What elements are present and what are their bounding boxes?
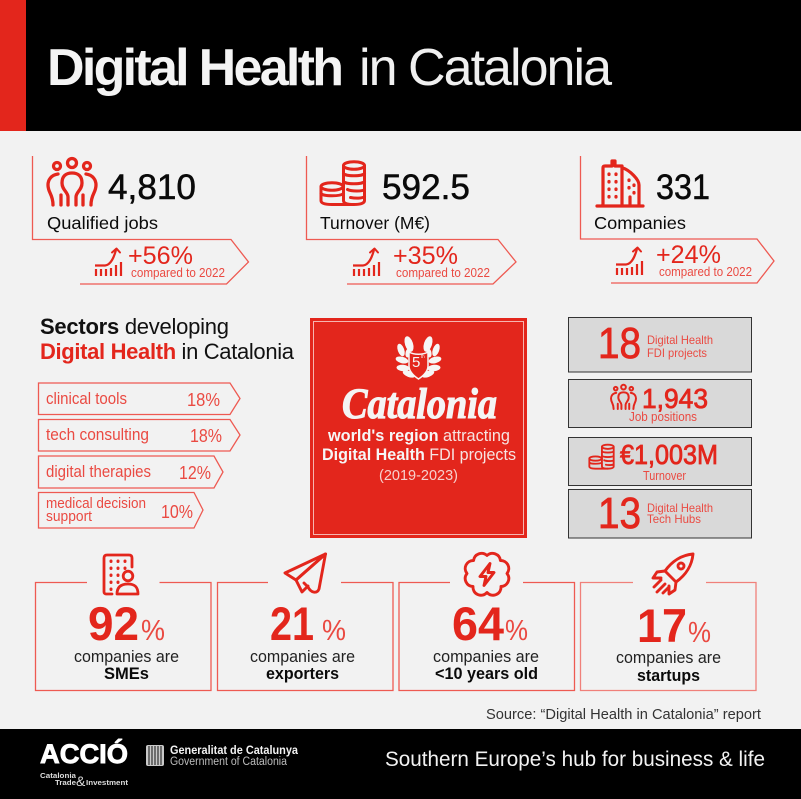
label bold: <10 years old: [435, 665, 538, 683]
logo: ACCIO: Catalonia: [40, 771, 77, 780]
panel: qualified jobs: [32, 156, 248, 284]
percent sign: %: [505, 615, 528, 647]
logo: ACCIO: Trade: [55, 778, 76, 787]
footer band: [0, 729, 801, 799]
value: turnover: 592.5: [382, 168, 470, 207]
icon: coins: [589, 445, 614, 469]
icon: people: [48, 158, 96, 205]
tagline: Southern Europe’s hub for business & life: [385, 748, 765, 771]
panel: tech hubs: Tech Hubs: [647, 512, 701, 526]
panel: FDI turnover: Turnover: [643, 469, 686, 483]
value: SMEs: 92: [88, 597, 139, 650]
sector: medical decision support: support: [46, 509, 92, 525]
sector: clinical tools: [38, 383, 240, 414]
panel: FDI turnover: €1,003M: [620, 439, 718, 470]
label: jobs: Qualified jobs: [47, 213, 158, 233]
value: exporters: 21: [270, 597, 314, 650]
icon: coins: [321, 162, 364, 204]
logo: ACCIO: [40, 738, 129, 789]
sector: clinical tools: clinical tools: [46, 389, 127, 408]
panel: SMEs: [36, 555, 211, 690]
heading: digital health: Digital Health in Catalonia: [40, 339, 295, 364]
title: Digital Health: [47, 39, 344, 97]
label: companies are: [250, 648, 355, 666]
panel: FDI projects: 18: [598, 319, 641, 368]
label bold: exporters: [266, 665, 339, 683]
panel: job positions: Job positions: [629, 409, 697, 424]
government name: Government of Catalonia: [170, 756, 288, 768]
label: companies are: [616, 649, 721, 667]
label bold: SMEs: [104, 665, 149, 683]
icon: rocket: [653, 554, 693, 594]
title: [47, 39, 612, 97]
label: companies: Companies: [594, 213, 686, 233]
growth: companies: +24%: [656, 241, 721, 269]
logo: ACCIO: Investment: [86, 778, 129, 787]
script name: Catalonia: [342, 381, 497, 428]
panel: tech hubs: [568, 489, 752, 538]
icon: brain with bolt: [465, 553, 509, 595]
panel: startups: [580, 554, 756, 690]
panel: job positions: 1,943: [642, 383, 708, 414]
heading: sectors: Sectors developing: [40, 314, 229, 339]
logo: ACCIO: ACCIÓ: [40, 738, 128, 769]
panel: ranking: [310, 318, 527, 538]
sector: medical decision support: 10%: [161, 502, 193, 522]
percent sign: %: [688, 617, 711, 649]
ranking text: world's region attracting: [327, 426, 510, 445]
note: turnover: compared to 2022: [396, 266, 490, 280]
sector: tech consulting: 18%: [190, 426, 222, 446]
sector: digital therapies: [38, 456, 223, 488]
period: (2019-2023): [379, 467, 458, 484]
ranking text: Digital Health FDI projects: [322, 445, 516, 464]
icon: growth: [95, 248, 121, 276]
percent sign: %: [141, 615, 165, 647]
sector: tech consulting: [38, 420, 240, 451]
logo: ACCIO: &: [76, 773, 86, 789]
icon: paper plane: [285, 554, 326, 592]
panel: FDI projects: [568, 318, 752, 372]
icon: building: [597, 161, 643, 206]
note: companies: compared to 2022: [659, 265, 752, 279]
panel: young companies: [399, 553, 574, 690]
panel: tech hubs: 13: [598, 489, 641, 538]
panel: FDI projects: FDI projects: [647, 346, 707, 360]
sector: digital therapies: digital therapies: [46, 462, 151, 481]
label bold: startups: [637, 667, 700, 685]
value: jobs: 4,810: [108, 168, 196, 207]
icon: growth: [353, 248, 379, 276]
note: jobs: compared to 2022: [131, 266, 225, 280]
icon: growth: [616, 248, 642, 275]
source note: Source: “Digital Health in Catalonia” report: [486, 706, 762, 723]
sector: medical decision support: [38, 492, 203, 528]
header band: [0, 0, 801, 131]
panel: tech hubs: Digital Health: [647, 501, 713, 515]
sector: clinical tools: 18%: [187, 390, 220, 410]
icon: laurel with rank: th: [421, 354, 425, 359]
icon: laurel with rank: [395, 335, 442, 379]
value: young companies: 64: [452, 597, 504, 650]
government name: Generalitat de Catalunya: [170, 745, 299, 757]
icon: building with person: [104, 555, 138, 594]
icon: laurel with rank: 5: [412, 354, 420, 371]
panel: FDI projects: Digital Health: [647, 333, 713, 347]
label: turnover: Turnover (M€): [320, 213, 430, 233]
percent sign: %: [322, 615, 346, 647]
label: companies are: [433, 648, 539, 666]
label: companies are: [74, 648, 179, 666]
title: in Catalonia: [359, 39, 612, 97]
value: startups: 17: [637, 599, 687, 652]
panel: FDI turnover: [568, 438, 752, 486]
panel: turnover: [306, 156, 516, 284]
panel: sectors: [38, 314, 295, 528]
sector: medical decision support: medical decision: [46, 496, 146, 512]
value: companies: 331: [656, 168, 710, 207]
sector: digital therapies: 12%: [179, 463, 211, 483]
panel: job positions: [568, 380, 752, 428]
icon: people: [611, 385, 636, 409]
growth: jobs: +56%: [128, 242, 193, 270]
panel: exporters: [218, 554, 393, 690]
sector: tech consulting: tech consulting: [46, 425, 149, 444]
growth: turnover: +35%: [393, 242, 458, 270]
logo: shield: [146, 745, 164, 766]
panel: companies: [580, 156, 774, 283]
